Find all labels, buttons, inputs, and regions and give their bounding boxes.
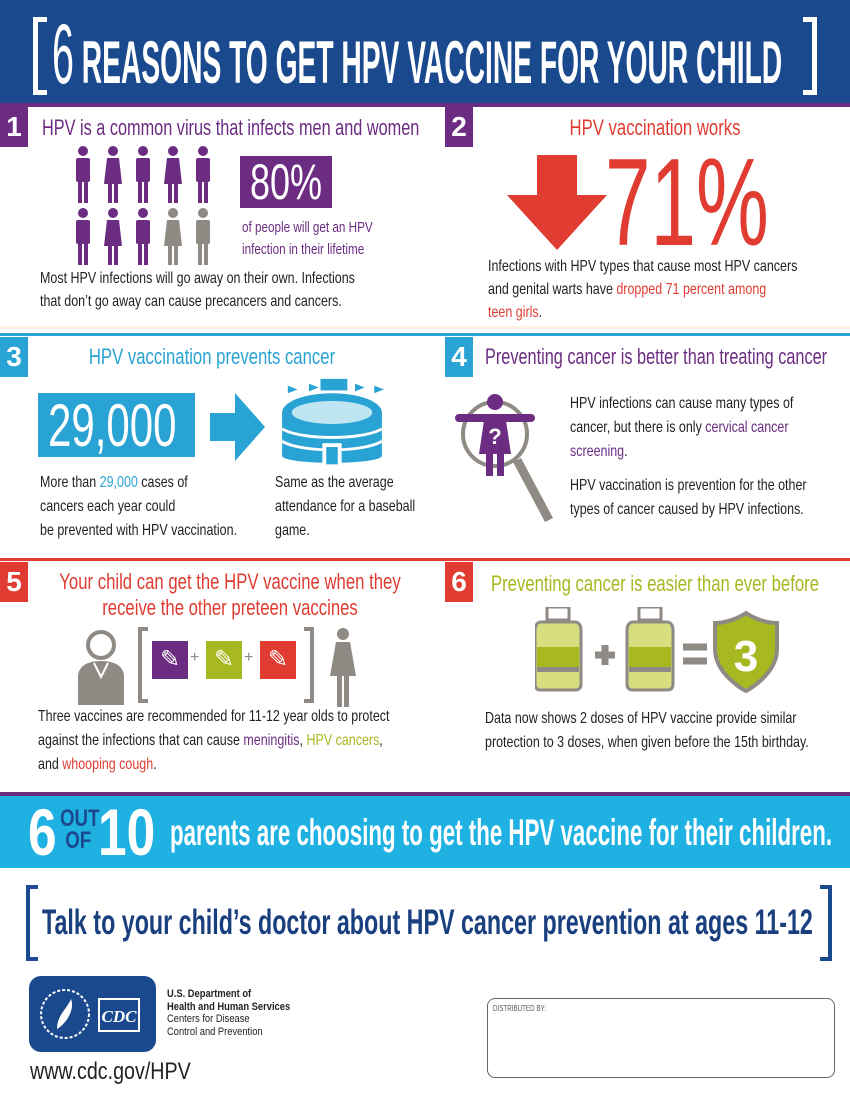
banner: 6 out of 10: OUT [60, 805, 100, 832]
panel 2 [445, 107, 797, 321]
vaccines bracket group [138, 627, 314, 703]
heading 1: HPV is a common virus that infects men and women [42, 115, 419, 140]
banner: 6 out of 10: 10 [98, 795, 155, 869]
icon: stadium [282, 378, 384, 464]
body text 4: screening. [570, 443, 628, 460]
icon: doctor [78, 630, 124, 705]
agency text: Health and Human Services [167, 1000, 290, 1012]
panel 6 [445, 562, 819, 751]
heading 3: HPV vaccination prevents cancer [89, 344, 335, 369]
number 4 [445, 337, 473, 377]
number 3: 3 [6, 341, 22, 372]
banner: 6 out of 10: 6 [28, 795, 57, 869]
heading 5 [59, 569, 401, 620]
body text 5: Three vaccines are recommended for 11-12 year olds to protect [38, 708, 389, 725]
url: www.cdc.gov/HPV [30, 1058, 191, 1085]
body text 3b: game. [275, 522, 310, 539]
vaccines bracket group: ✎ [160, 646, 180, 673]
body text 1: that don’t go away can cause precancers and cancers. [40, 293, 342, 310]
icon: down arrow [507, 155, 607, 250]
heading 6: Preventing cancer is easier than ever before [491, 571, 819, 596]
agency text: Centers for Disease [167, 1013, 250, 1025]
stat caption [242, 219, 373, 258]
vaccines bracket group: ✎ [214, 646, 234, 673]
body text 1 [40, 270, 355, 310]
stat 71%: 71% [605, 134, 769, 272]
body text 5 [38, 708, 390, 773]
distributed by box [487, 998, 835, 1078]
icon: vials equal shield [535, 607, 779, 694]
body text 5: and whooping cough. [38, 756, 157, 773]
stat caption: of people will get an HPV [242, 219, 373, 236]
header banner [0, 0, 850, 103]
body text 2 [488, 258, 797, 321]
number 2 [445, 107, 473, 147]
body text 2: and genital warts have dropped 71 percent among [488, 281, 766, 298]
panel 3: 29,000 [48, 392, 176, 459]
logo: HHS / CDC: CDC [102, 1007, 137, 1026]
body text 2: Infections with HPV types that cause most HPV cancers [488, 258, 797, 275]
call to action: Talk to your child’s doctor about HPV cancer prevention at ages 11-12 [42, 903, 813, 942]
banner: 6 out of 10: parents are choosing to get the HPV vaccine for their children. [170, 812, 832, 853]
logo: HHS / CDC [29, 976, 156, 1052]
body text 6: protection to 3 doses, when given before the 15th birthday. [485, 734, 809, 751]
panel 3 [0, 337, 415, 539]
banner: 6 out of 10 [0, 796, 850, 868]
panel 4: HPV vaccination is prevention for the other [570, 477, 807, 494]
heading 5: Your child can get the HPV vaccine when they [59, 569, 401, 594]
body text 4: HPV infections can cause many types of [570, 395, 793, 412]
body text 3a [40, 474, 237, 539]
body text 3a: cancers each year could [40, 498, 175, 515]
icon: girl [330, 628, 356, 707]
number 6: 6 [451, 566, 467, 597]
arrow right [210, 393, 265, 461]
stat caption: infection in their lifetime [242, 241, 364, 258]
panel 4 [445, 337, 827, 522]
number 2: 2 [451, 111, 467, 142]
body text 3a: be prevented with HPV vaccination. [40, 522, 237, 539]
body text 3b [275, 474, 415, 539]
body text 3b: Same as the average [275, 474, 394, 491]
icon: magnifier with figure [455, 394, 553, 522]
body text 2: teen girls. [488, 304, 542, 321]
number 5: 5 [6, 566, 22, 597]
agency text: Control and Prevention [167, 1026, 263, 1038]
panel 1 [0, 107, 419, 310]
distributed by box: DISTRIBUTED BY: [493, 1004, 546, 1013]
number 1 [0, 107, 28, 147]
vaccines bracket group: + [190, 649, 199, 666]
body text 4 [570, 395, 794, 460]
number 6 [445, 562, 473, 602]
stat box 29,000 [38, 393, 195, 457]
icon: vials equal shield: 3 [734, 632, 758, 681]
number 5 [0, 562, 28, 602]
banner: 6 out of 10: OF [65, 827, 91, 854]
body text 3b: attendance for a baseball [275, 498, 415, 515]
panel 5 [0, 562, 401, 773]
vaccines bracket group: + [244, 649, 253, 666]
body text 3a: More than 29,000 cases of [40, 474, 188, 491]
number 3 [0, 337, 28, 377]
heading 4: Preventing cancer is better than treating cancer [485, 344, 827, 369]
icon: people grid [76, 146, 210, 265]
vaccines bracket group: ✎ [268, 646, 288, 673]
panel 4: types of cancer caused by HPV infections. [570, 501, 804, 518]
stat 80% [240, 156, 332, 208]
body text 6: Data now shows 2 doses of HPV vaccine provide similar [485, 710, 796, 727]
right bracket [803, 17, 817, 95]
left bracket [33, 17, 47, 95]
number 4: 4 [451, 341, 467, 372]
body text 6 [485, 710, 809, 751]
body text 5: against the infections that can cause meningitis, HPV cancers, [38, 732, 383, 749]
title: 6 REASONS TO GET HPV VACCINE FOR YOUR CHILD [52, 7, 782, 101]
panel 1: 80% [250, 154, 322, 210]
body text 4: cancer, but there is only cervical cancer [570, 419, 789, 436]
icon: magnifier with figure: ? [488, 424, 502, 449]
heading 5: receive the other preteen vaccines [102, 595, 358, 620]
body text 1: Most HPV infections will go away on their own. Infections [40, 270, 355, 287]
heading 2: HPV vaccination works [570, 115, 740, 140]
agency text [167, 988, 290, 1038]
agency text: U.S. Department of [167, 988, 251, 1000]
number 1: 1 [6, 111, 22, 142]
call to action [26, 885, 832, 961]
